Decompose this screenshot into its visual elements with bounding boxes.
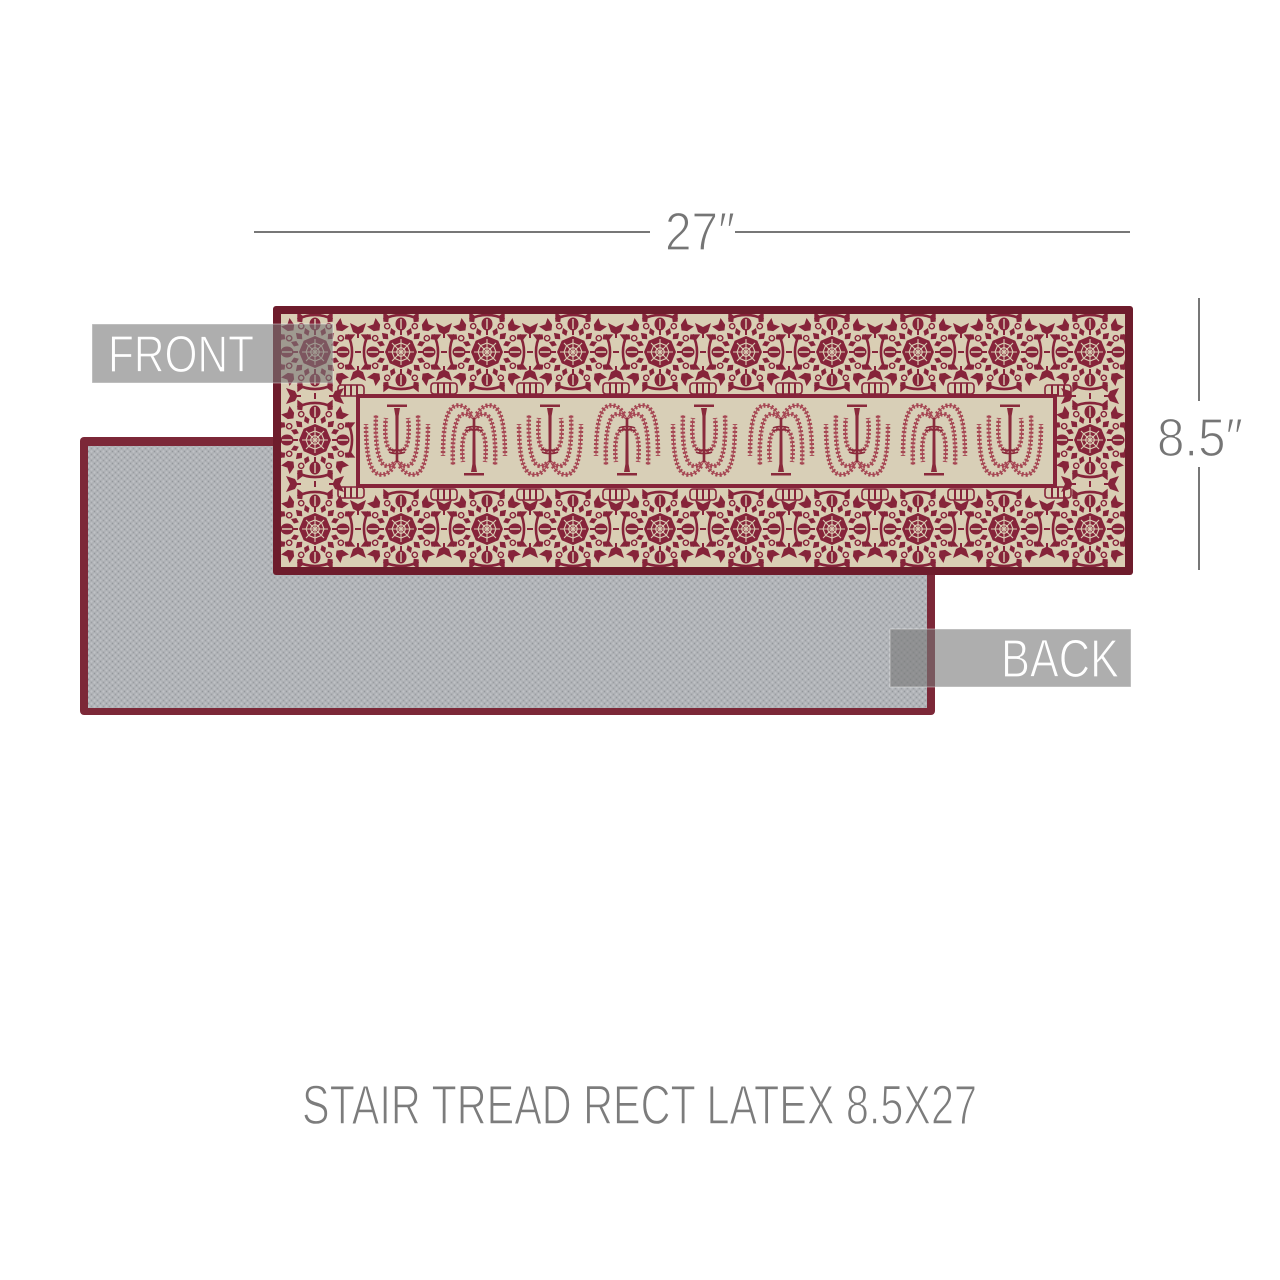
panel: back of the rug — [80, 437, 935, 715]
label: BACK — [890, 629, 1131, 689]
width dimension: 27 inches: 27″ — [665, 202, 735, 262]
rug binding border — [273, 306, 1133, 575]
panel: front of the rug — [273, 306, 1133, 575]
height dimension: 8.5 inches: 8.5″ — [1157, 408, 1243, 468]
centre panel with willow trees — [358, 396, 1055, 486]
willow tree row — [366, 404, 1041, 476]
label: FRONT: FRONT — [108, 326, 254, 384]
patterned medallion band — [273, 310, 1132, 571]
label: BACK: BACK — [1001, 629, 1119, 689]
product title: STAIR TREAD RECT LATEX 8.5X27 — [302, 1073, 977, 1136]
